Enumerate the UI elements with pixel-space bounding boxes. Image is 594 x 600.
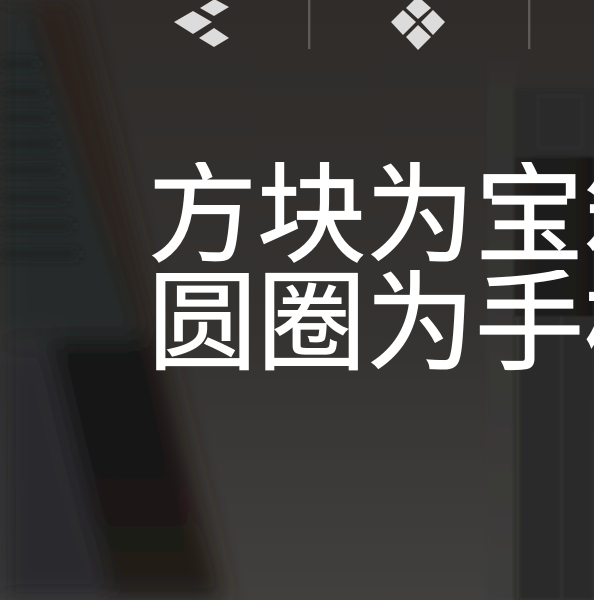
divider left [308,0,310,49]
icon: four diamonds [391,0,445,50]
top icon row [174,0,530,50]
icon: three diamonds [174,0,229,47]
divider right [528,0,530,49]
